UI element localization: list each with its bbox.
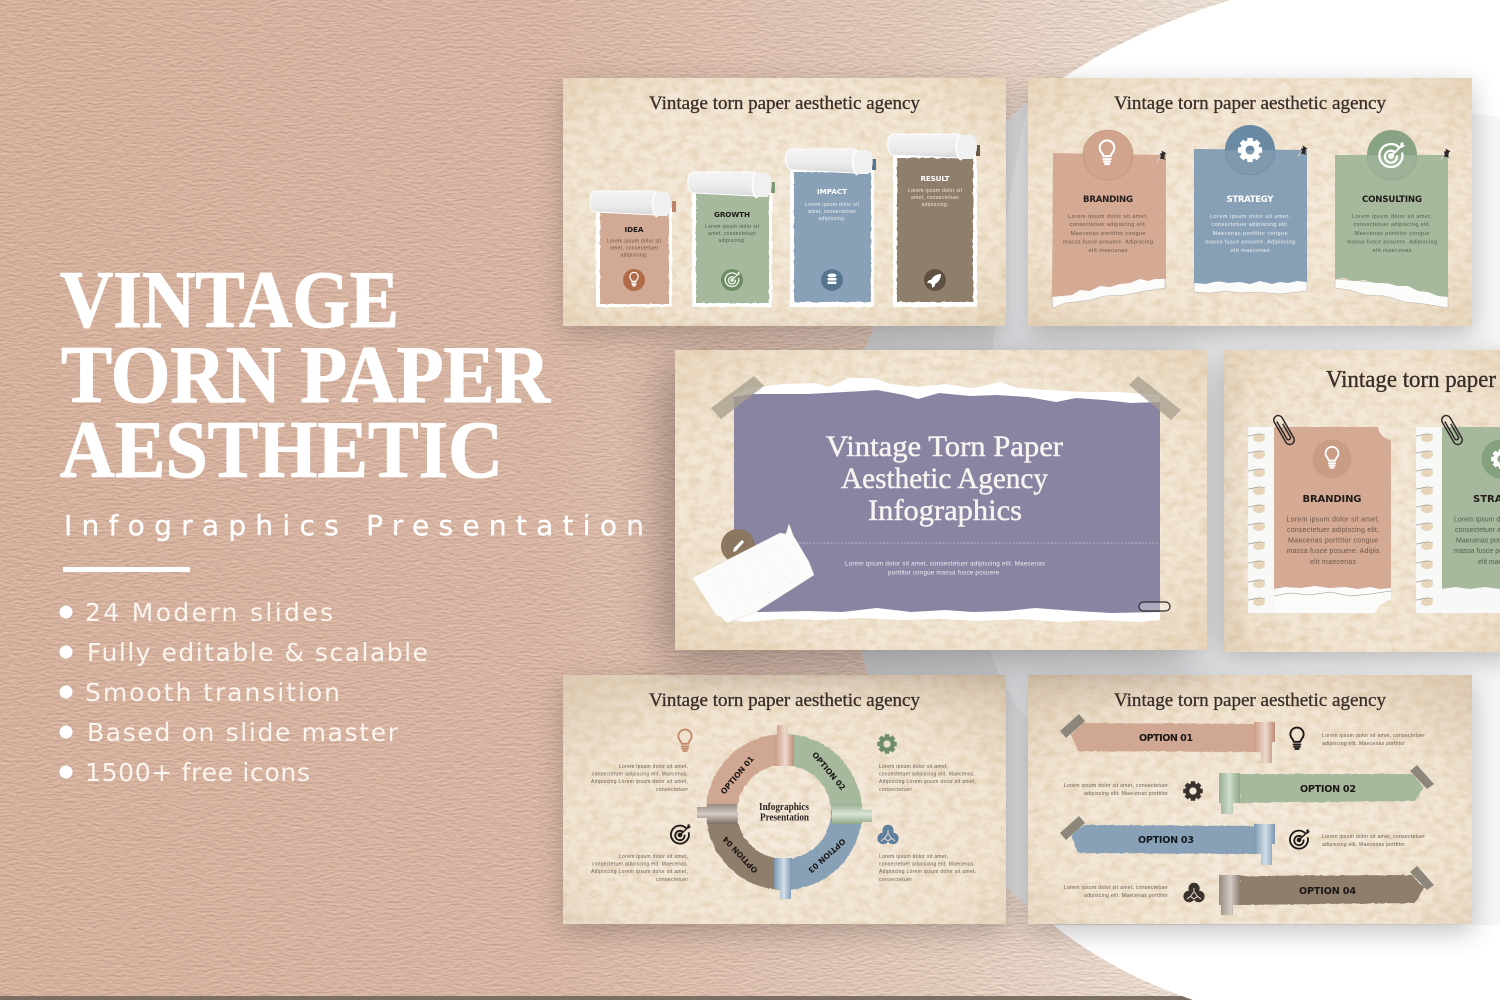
card: strategy: STRATEGY <box>1226 195 1274 205</box>
card: consulting: consectetuer adipiscing elit. <box>1354 222 1431 228</box>
ribbon: option 04: OPTION 04 <box>1299 886 1356 897</box>
column: result <box>888 134 980 307</box>
right text blocks: Lorem ipsum dolor sit amet, <box>879 764 948 770</box>
option 04 text <box>1064 885 1168 899</box>
icon: venn <box>1183 883 1205 902</box>
slide 1 heading: Vintage torn paper aesthetic agency <box>649 93 920 114</box>
ring chart <box>697 725 872 899</box>
card: strategy: consectetuer adipiscing elit. <box>1212 222 1289 228</box>
ribbon: option 02 <box>1219 765 1434 814</box>
card: notebook branding: BRANDING <box>1302 494 1362 505</box>
option 01 text <box>1322 733 1425 747</box>
icon: target <box>671 824 691 844</box>
card: consulting: CONSULTING <box>1362 195 1422 205</box>
right text blocks <box>879 764 976 883</box>
card: notebook branding: Lorem ipsum dolor sit amet, <box>1286 516 1380 524</box>
right text blocks: Adipiscing Lorem ipsum dolor sit amet, <box>879 869 976 875</box>
column: growth: amet, consectetuer <box>708 231 756 237</box>
tape left <box>711 376 764 419</box>
card: notebook branding: Maecenas porttitor congue <box>1288 538 1378 544</box>
option 03 text: adipiscing elit. Maecenas porttitor <box>1322 842 1405 848</box>
option 04 text: adipiscing elit. Maecenas porttitor <box>1084 893 1168 899</box>
ribbon: option 03: OPTION 03 <box>1138 835 1194 846</box>
right text blocks: Lorem ipsum dolor sit amet, <box>879 854 948 860</box>
column: growth: adipiscing. <box>718 238 746 244</box>
left text blocks: consectetuer adipiscing elit. Maecenas. <box>592 862 688 868</box>
card: branding: elit maecenas <box>1088 248 1128 254</box>
title <box>60 254 551 495</box>
icon: pencil badge <box>721 529 755 563</box>
option 01 text: adipiscing elit. Maecenas porttitor <box>1322 741 1405 747</box>
column: result: Lorem ipsum dolor sit <box>908 188 963 194</box>
slide 4 heading: Vintage torn paper <box>1326 367 1496 393</box>
column: idea: Lorem ipsum dolor sit <box>607 238 662 244</box>
right text blocks: consectetuer <box>879 787 912 793</box>
card: strategy <box>1194 125 1308 294</box>
card: branding: BRANDING <box>1083 195 1133 205</box>
icon: bulb <box>678 730 692 751</box>
column: impact: amet, consectetuer <box>808 209 856 215</box>
icon: gear <box>1183 781 1203 801</box>
dashed divider <box>799 542 1159 544</box>
left text blocks: Adipiscing Lorem ipsum dolor sit amet, <box>591 779 688 785</box>
card: notebook branding: massa fusce posuere. Adipis <box>1286 548 1380 555</box>
title: TORN PAPER <box>61 329 551 420</box>
left text blocks: consectetuer adipiscing elit. Maecenas. <box>592 772 688 778</box>
cover heading: Aesthetic Agency <box>841 462 1048 495</box>
panel: slide 4 notebook cards <box>1224 350 1500 652</box>
column: impact: Lorem ipsum dolor sit <box>805 202 860 208</box>
ribbon: option 02: OPTION 02 <box>1300 784 1356 795</box>
feature list: 1500+ free icons <box>85 758 310 787</box>
card: consulting: massa fusce posuere. Adipiscing <box>1347 240 1437 246</box>
column: idea: adipiscing. <box>620 252 648 258</box>
column: idea <box>590 191 676 307</box>
torn white paper backing <box>734 378 1160 622</box>
ribbon: option 03 <box>1060 816 1275 865</box>
column: growth: GROWTH <box>714 210 750 219</box>
card: notebook branding: consectetuer adipiscing elit. <box>1287 527 1379 534</box>
feature list <box>60 598 428 787</box>
cover text: Lorem ipsum dolor sit amet, consectetuer adipiscing elit. Maecenas <box>845 560 1045 568</box>
column: growth <box>688 172 775 307</box>
card: strategy: elit maecenas <box>1230 248 1270 254</box>
slide 5 heading: Vintage torn paper aesthetic agency <box>649 690 920 711</box>
column: result: amet, consectetuer <box>911 195 959 201</box>
column: idea: IDEA <box>624 225 644 234</box>
option 02 text: Lorem ipsum dolor sit amet, consectetuer <box>1064 783 1168 789</box>
option 03 text <box>1322 834 1425 848</box>
card: branding: Maecenas porttitor congue <box>1070 231 1146 237</box>
title: VINTAGE <box>60 254 399 345</box>
slide 6 heading: Vintage torn paper aesthetic agency <box>1114 690 1386 711</box>
card: consulting: Maecenas porttitor congue <box>1354 231 1430 237</box>
ring chart: Infographics <box>759 802 809 813</box>
option 02 text <box>1064 783 1168 797</box>
cover heading: Infographics <box>868 494 1022 527</box>
icon: venn <box>877 825 899 844</box>
column: result: adipiscing. <box>922 202 948 208</box>
left text blocks: Lorem ipsum dolor sit amet, <box>619 854 688 860</box>
subtitle: Infographics Presentation <box>64 509 644 542</box>
column: idea: amet, consectetuer <box>610 246 658 252</box>
ribbon: option 01 <box>1060 714 1275 763</box>
feature list: Fully editable & scalable <box>87 638 428 667</box>
title: AESTHETIC <box>60 404 503 495</box>
left text blocks: Lorem ipsum dolor sit amet, <box>619 764 688 770</box>
card: notebook strategy (cropped) <box>1416 414 1500 613</box>
cover text: porttitor congue massa fusce posuere. <box>888 570 1001 576</box>
torn note paper <box>692 524 814 623</box>
column: result: RESULT <box>920 174 950 183</box>
card: branding: Lorem ipsum dolor sit amet, <box>1068 214 1148 220</box>
card: strategy: massa fusce posuere. Adipiscing <box>1205 240 1295 246</box>
option 04 text: Lorem ipsum dolor sit amet, consectetuer <box>1064 885 1168 891</box>
card: strategy: Lorem ipsum dolor sit amet, <box>1210 214 1290 220</box>
panel: slide 6 ribbons <box>1028 675 1472 924</box>
feature list: Based on slide master <box>87 718 399 747</box>
left text blocks: Adipiscing Lorem ipsum dolor sit amet, <box>591 869 688 875</box>
card: branding: massa fusce posuere. Adipiscing <box>1063 240 1153 246</box>
panel: slide 5 ring diagram <box>563 675 1006 924</box>
icon: gear <box>877 734 897 754</box>
column: impact <box>786 149 876 307</box>
column: impact: adipiscing. <box>818 216 846 222</box>
background: white circle shape <box>848 0 1500 1000</box>
slide shadows <box>563 86 1500 932</box>
cover heading <box>826 430 1063 527</box>
icon: bulb <box>1290 728 1304 749</box>
background: inner lighter shape <box>986 96 1500 925</box>
background: grey shadow zone <box>848 78 1200 925</box>
column: impact: IMPACT <box>817 187 847 196</box>
card: notebook branding: elit maecenas <box>1310 559 1356 566</box>
right text blocks: Adipiscing Lorem ipsum dolor sit amet, <box>879 779 976 785</box>
ribbon: option 01: OPTION 01 <box>1139 733 1193 744</box>
panel: slide 2 pinned cards <box>1028 78 1472 326</box>
bottom dark edge <box>0 996 1195 1000</box>
feature list: Smooth transition <box>85 678 340 707</box>
option 02 text: adipiscing elit. Maecenas porttitor <box>1084 791 1168 797</box>
ring chart: OPTION 04 <box>721 834 760 875</box>
card: consulting: Lorem ipsum dolor sit amet, <box>1352 214 1432 220</box>
card: consulting <box>1335 130 1450 308</box>
left text blocks: consectetuer <box>656 787 688 793</box>
left text blocks: consectetuer <box>656 877 688 883</box>
card: notebook branding <box>1248 414 1391 613</box>
paper clip <box>1139 602 1170 611</box>
cover heading: Vintage Torn Paper <box>826 430 1063 463</box>
purple torn sheet <box>734 390 1160 613</box>
feature list: 24 Modern slides <box>85 598 333 627</box>
slide 2 heading: Vintage torn paper aesthetic agency <box>1114 93 1386 114</box>
ring chart: OPTION 02 <box>810 750 847 792</box>
cover text <box>845 560 1045 576</box>
panel: central cover slide <box>668 350 1207 662</box>
right text blocks: consectetuer adipiscing elit. Maecenas. <box>879 862 975 868</box>
ribbon: option 04 <box>1219 866 1434 915</box>
ring chart: OPTION 01 <box>719 754 756 796</box>
card: strategy: Maecenas porttitor congue <box>1212 231 1288 237</box>
option 01 text: Lorem ipsum dolor sit amet, consectetuer <box>1322 733 1425 739</box>
ring chart: Presentation <box>760 812 809 824</box>
column: growth: Lorem ipsum dolor sit <box>705 224 760 230</box>
card: branding <box>1052 130 1166 308</box>
ring chart: OPTION 03 <box>806 837 847 875</box>
right text blocks: consectetuer adipiscing elit. Maecenas. <box>879 772 975 778</box>
panel: slide 1 rolled columns <box>563 78 1006 326</box>
left text blocks <box>591 764 688 883</box>
right text blocks: consectetuer <box>879 877 912 883</box>
tape right <box>1129 376 1181 420</box>
card: consulting: elit maecenas <box>1372 248 1412 254</box>
option 03 text: Lorem ipsum dolor sit amet, consectetuer <box>1322 834 1425 840</box>
card: branding: consectetuer adipiscing elit. <box>1070 222 1147 228</box>
icon: target <box>1290 829 1310 849</box>
divider rule <box>63 567 190 572</box>
